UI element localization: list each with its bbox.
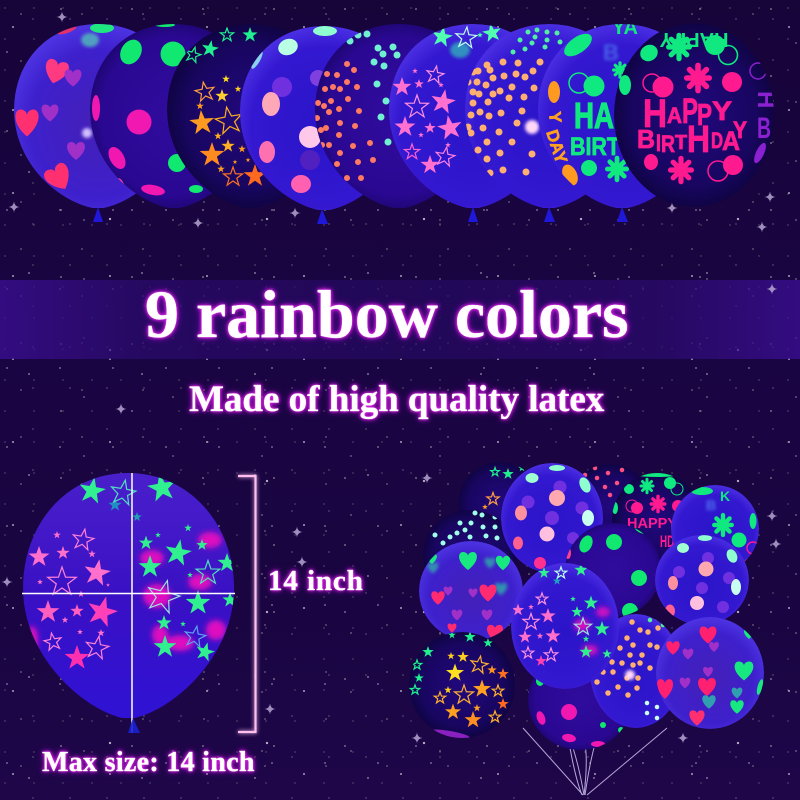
balloon 9: pink happy birthday: B xyxy=(637,124,655,154)
balloon 8: green happy birthday: Y xyxy=(545,111,565,124)
balloon 9: pink happy birthday: H xyxy=(687,119,710,161)
bouquet balloon: stars center xyxy=(511,563,619,689)
ribbons xyxy=(523,698,667,795)
back balloon: happy birthday xyxy=(612,473,692,560)
balloon 8: green happy birthday xyxy=(538,24,660,208)
balloon 9: pink happy birthday: P xyxy=(682,92,698,131)
balloon 8: green happy birthday: BIRT xyxy=(570,133,620,161)
balloon 8: green happy birthday: YA xyxy=(612,17,638,39)
balloon 9: pink happy birthday: HAPPY xyxy=(659,28,728,50)
balloon 6: pink stars xyxy=(389,24,511,208)
balloon 9: pink happy birthday: Y xyxy=(733,117,747,144)
balloon 9: pink happy birthday: R xyxy=(661,131,675,158)
bouquet balloon: magenta dots bottom xyxy=(528,677,624,750)
balloon 9: pink happy birthday: P xyxy=(697,97,712,132)
back balloon: white dots xyxy=(423,510,516,566)
balloon knots xyxy=(93,207,628,224)
back balloon: green birthday: B xyxy=(706,497,716,513)
back balloon: happy birthday: HAPPY xyxy=(627,515,677,532)
balloon 5: orange and teal dots xyxy=(315,24,436,208)
bouquet balloon: orange stars xyxy=(409,631,515,740)
balloon 9: pink happy birthday: A xyxy=(667,103,682,128)
balloon 7: peach dots xyxy=(465,24,586,208)
balloon 9: pink happy birthday: B xyxy=(757,112,771,145)
balloon row at top xyxy=(14,17,779,224)
bouquet balloon: hearts left xyxy=(419,541,523,641)
balloon 9: pink happy birthday: A xyxy=(722,126,740,156)
measuring cross lines xyxy=(22,473,235,733)
balloon 9: pink happy birthday: T xyxy=(675,132,687,154)
balloon 1: hearts xyxy=(14,24,136,208)
balloon 9: pink happy birthday: H xyxy=(752,91,779,108)
height bracket xyxy=(238,476,256,732)
title band xyxy=(0,280,800,359)
balloon 9: pink happy birthday: Y xyxy=(712,96,732,126)
balloon 8: green happy birthday: HA xyxy=(574,95,614,136)
green stars xyxy=(77,471,238,662)
balloon 9: pink happy birthday xyxy=(614,23,779,207)
bouquet balloon: large pastel dots xyxy=(501,463,603,573)
back balloon: happy birthday: HDAY xyxy=(660,532,687,551)
balloon 2: green and magenta dots xyxy=(90,24,212,208)
max size label: Max size: 14 inch xyxy=(42,747,255,778)
sizing balloon with 14 inch cross xyxy=(20,470,240,733)
bouquet balloon: pastel dots right xyxy=(655,535,749,625)
balloon 8: green happy birthday: B xyxy=(603,40,619,65)
height label: 14 inch xyxy=(268,565,364,597)
balloon 9: pink happy birthday: H xyxy=(643,92,667,136)
large star balloon xyxy=(20,470,240,720)
back balloon: stars xyxy=(458,462,525,522)
balloon 8: green happy birthday: DAY xyxy=(542,127,571,167)
balloon knot xyxy=(128,718,140,733)
balloon 9: pink happy birthday: D xyxy=(711,128,723,153)
bouquet balloon: hearts right xyxy=(656,617,764,729)
balloon bouquet xyxy=(409,462,764,795)
balloon 9: pink happy birthday: I xyxy=(656,130,661,157)
pink stars xyxy=(29,531,121,669)
subtitle: Made of high quality latex xyxy=(189,379,604,420)
bouquet balloon: peach dots xyxy=(591,614,671,728)
main title: 9 rainbow colors xyxy=(145,276,629,352)
back balloon: pink dots xyxy=(582,464,640,524)
balloon 4: pastel dots xyxy=(240,26,363,210)
balloon 3: orange stars xyxy=(167,24,289,208)
bouquet balloon: green dots center xyxy=(565,523,661,619)
back balloon: green birthday: K xyxy=(720,488,730,504)
back balloon: green birthday xyxy=(671,485,759,562)
